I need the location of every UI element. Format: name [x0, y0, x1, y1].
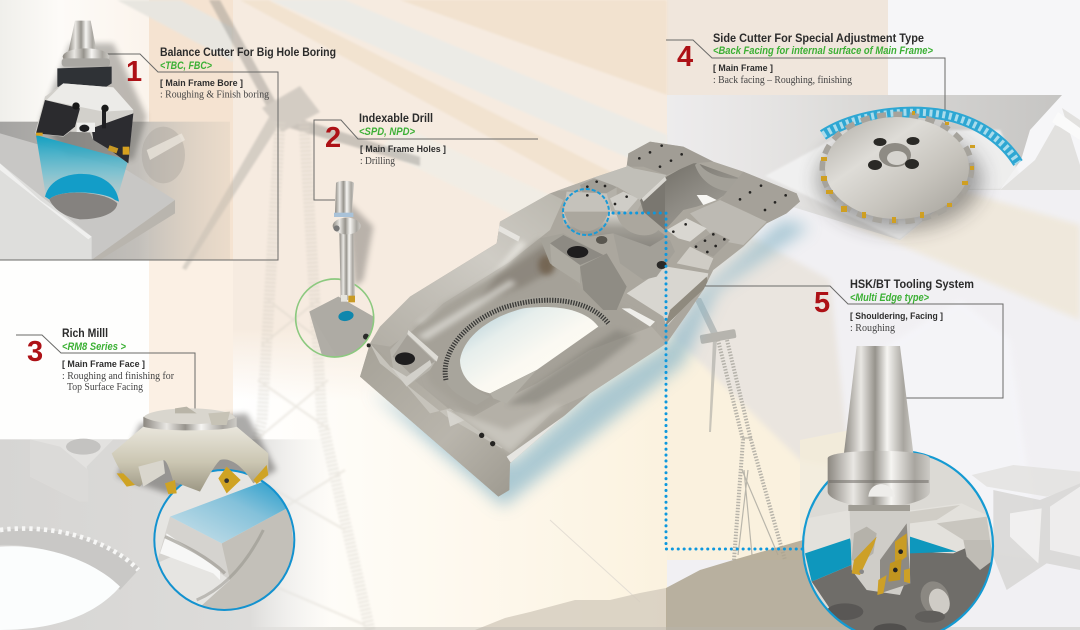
dotted connector and dashed target circle: [563, 189, 803, 549]
tool 5: HSK/BT tool: [802, 346, 995, 630]
label 1: balance cutter: [126, 47, 336, 100]
tool 1: balance cutter: [35, 21, 147, 219]
panel: tool 3 workpiece: [0, 439, 333, 630]
label 3: rich mill: <RM8 Series >: [62, 341, 126, 353]
top plates: [627, 142, 713, 175]
label 2: indexable drill: <SPD, NPD>: [359, 126, 415, 138]
panel: tool 4 workpiece: [667, 95, 1080, 240]
callout line 5: [705, 286, 1003, 398]
callout line 4: [666, 40, 945, 122]
tool 3: rich mill: [112, 407, 297, 610]
label 3: rich mill: : Roughing and finishing for: [62, 371, 175, 382]
tool 4: side cutter: [818, 111, 1018, 230]
center block: [543, 244, 552, 264]
cavity: [640, 162, 740, 230]
raised center plane: [627, 267, 708, 327]
left rail: [370, 193, 563, 347]
label 5: tooling system: [814, 279, 974, 334]
label 4: side cutter: [ Main Frame ]: [713, 63, 773, 74]
label 3: rich mill: [27, 328, 175, 393]
callout line 3: [16, 335, 195, 412]
callout line 2: [314, 120, 538, 200]
right rail: [450, 327, 667, 453]
hill landscape: [0, 530, 1080, 630]
label 3: rich mill: Rich Milll: [62, 328, 108, 340]
main frame casting: [360, 142, 810, 507]
top left plate: [557, 178, 641, 215]
label 3: rich mill: Top Surface Facing: [67, 382, 143, 393]
label 2: indexable drill: Indexable Drill: [359, 113, 433, 125]
label 1: balance cutter: : Roughing & Finish boring: [160, 90, 269, 100]
tool 5 milling head: [849, 503, 911, 595]
panel: tool 5 workpiece ghost: [972, 465, 1080, 590]
label 2: indexable drill: [325, 113, 446, 167]
front end face: [360, 343, 510, 497]
label 4: side cutter: <Back Facing for internal surface of Main Frame>: [713, 45, 933, 57]
label 4: side cutter: : Back facing – Roughing, finishing: [713, 75, 852, 86]
label 4: side cutter: 4: [677, 41, 693, 73]
label 3: rich mill: 3: [27, 336, 43, 368]
label 2: indexable drill: : Drilling: [360, 156, 395, 167]
upper bore shell: [648, 270, 662, 279]
tool 2: indexable drill: [296, 181, 374, 360]
panel: tool 1 workpiece: [0, 122, 230, 260]
label 2: indexable drill: [ Main Frame Holes ]: [360, 144, 446, 155]
label 1: balance cutter: Balance Cutter For Big Hole Boring: [160, 47, 336, 59]
label 3: rich mill: [ Main Frame Face ]: [62, 359, 145, 370]
big bore with toothed ring: [444, 296, 612, 405]
label 5: tooling system: 5: [814, 287, 830, 319]
label 5: tooling system: [ Shouldering, Facing ]: [850, 311, 943, 322]
wind turbine: left background: [182, 0, 420, 630]
front corner pocket: [390, 334, 436, 383]
label 4: side cutter: [677, 33, 933, 86]
label 2: indexable drill: 2: [325, 122, 341, 154]
wind turbine: center background: [694, 298, 785, 560]
label 1: balance cutter: <TBC, FBC>: [160, 60, 212, 72]
inner floor: [414, 238, 538, 330]
label 1: balance cutter: [ Main Frame Bore ]: [160, 78, 243, 89]
label 1: balance cutter: 1: [126, 56, 142, 88]
label 5: tooling system: <Multi Edge type>: [850, 292, 929, 304]
label 4: side cutter: Side Cutter For Special Adjustment Type: [713, 33, 924, 45]
label 5: tooling system: : Roughing: [850, 323, 895, 334]
label 5: tooling system: HSK/BT Tooling System: [850, 279, 974, 291]
callout line 1: [0, 54, 278, 260]
frame bolt holes: [367, 144, 787, 446]
